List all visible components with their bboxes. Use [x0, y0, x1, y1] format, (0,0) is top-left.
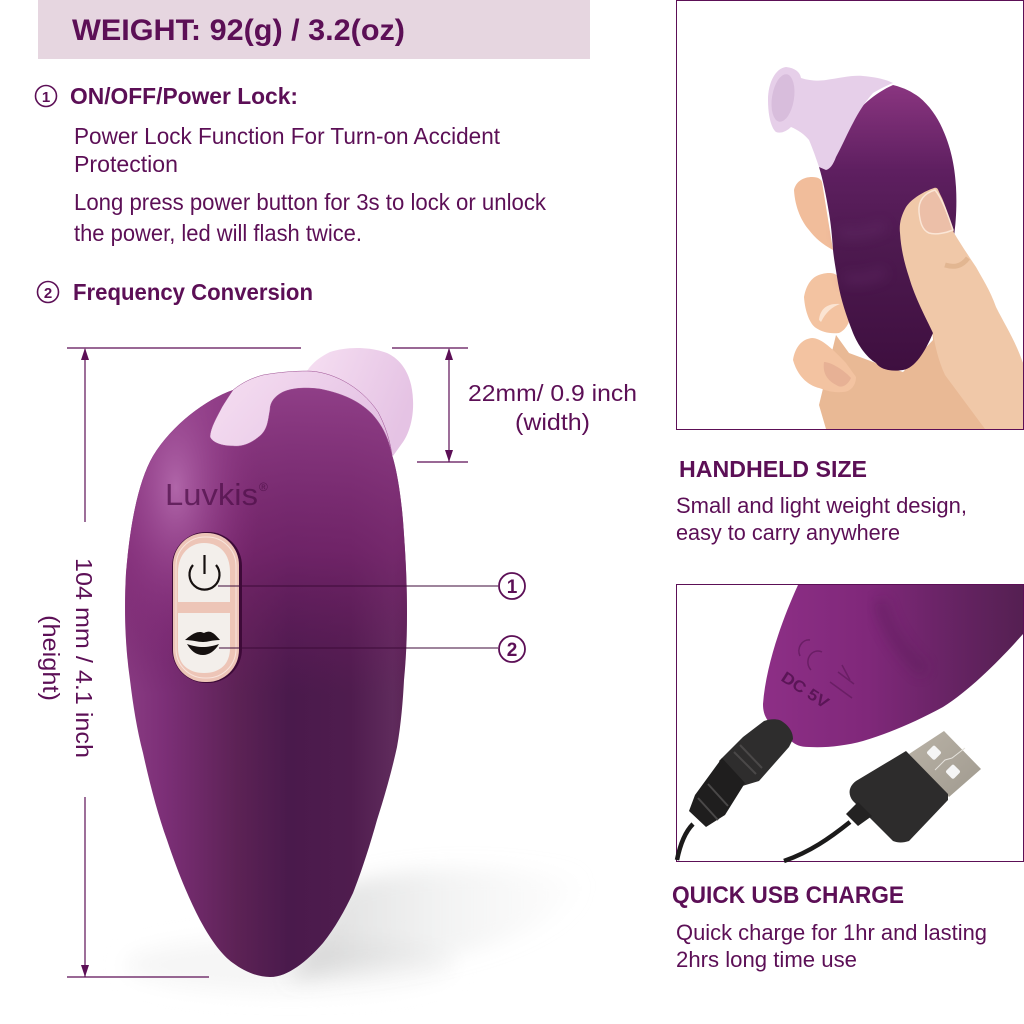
- finger 3: [793, 338, 856, 392]
- weight banner: [38, 0, 590, 59]
- section 1: power lock: ON/OFF/Power Lock:: [70, 83, 298, 109]
- thumbnail: [919, 190, 953, 234]
- text: usb charge description: [676, 920, 987, 972]
- text: handheld size description: [676, 493, 967, 545]
- text: handheld size description: easy to carry anywhere: [676, 520, 900, 545]
- usb plug: [850, 751, 948, 842]
- panel: handheld photo: [676, 0, 1024, 430]
- icon: lips: [185, 632, 220, 655]
- device ridge highlights: [838, 226, 885, 279]
- thumb crease: [945, 258, 968, 266]
- main product illustration: ®: [259, 480, 268, 494]
- dimension: width: (width): [515, 409, 590, 435]
- logo: Luvkis: [165, 477, 258, 512]
- device cap: [768, 67, 893, 170]
- callout 1: 1: [507, 577, 518, 598]
- device body: [819, 85, 956, 371]
- lips button: [178, 613, 230, 673]
- section 1: power lock: 1: [42, 89, 50, 106]
- callout 2: [219, 636, 525, 662]
- section 1: power lock: [36, 83, 546, 246]
- main product illustration: [125, 348, 413, 977]
- button housing: [172, 532, 242, 683]
- usb strain relief: [846, 802, 872, 826]
- embossed marks: [799, 640, 854, 698]
- floor shadow: [125, 868, 577, 993]
- section 1: power lock: the power, led will flash twice.: [74, 220, 362, 246]
- device tail: [763, 585, 1023, 747]
- callout 2: 2: [507, 640, 517, 661]
- device ridge shading: [880, 600, 925, 672]
- cable: [677, 822, 850, 861]
- panel: usb photo: [676, 584, 1024, 862]
- finger 1: [794, 177, 833, 250]
- thumb: [900, 188, 1023, 429]
- body: [125, 388, 407, 977]
- heading: handheld size: HANDHELD SIZE: [679, 456, 867, 482]
- text: handheld size description: Small and light weight design,: [676, 493, 967, 518]
- power button: [178, 543, 230, 602]
- section 1: power lock: Protection: [74, 151, 178, 177]
- dimension: width: 22mm/ 0.9 inch: [468, 380, 637, 406]
- nozzle: [307, 348, 413, 456]
- section 1: power lock: Long press power button for 3s to lock or unlock: [74, 189, 546, 215]
- weight banner: WEIGHT: 92(g) / 3.2(oz): [72, 14, 405, 47]
- usb metal: [909, 731, 981, 797]
- section 1: power lock: Power Lock Function For Turn-on Accident: [74, 123, 501, 149]
- section 2: frequency conversion: 2: [44, 285, 52, 302]
- section 2: frequency conversion: Frequency Conversion: [73, 279, 313, 305]
- dimension: height: (height): [38, 615, 64, 701]
- dimension: width: [392, 348, 637, 462]
- dimension: height: 104 mm / 4.1 inch: [71, 558, 97, 758]
- text: usb charge description: Quick charge for 1hr and lasting: [676, 920, 987, 945]
- text: usb charge description: 2hrs long time use: [676, 947, 857, 972]
- dc plug: [719, 719, 793, 787]
- panel: usb photo: DC 5V: [778, 669, 832, 712]
- cap: [210, 371, 392, 455]
- hand palm: [819, 233, 1023, 429]
- heading: quick usb charge: QUICK USB CHARGE: [672, 882, 904, 909]
- finger 2: [804, 273, 852, 333]
- icon: power: [190, 555, 220, 590]
- callout 1: [218, 573, 525, 599]
- dimension: height: [38, 348, 301, 977]
